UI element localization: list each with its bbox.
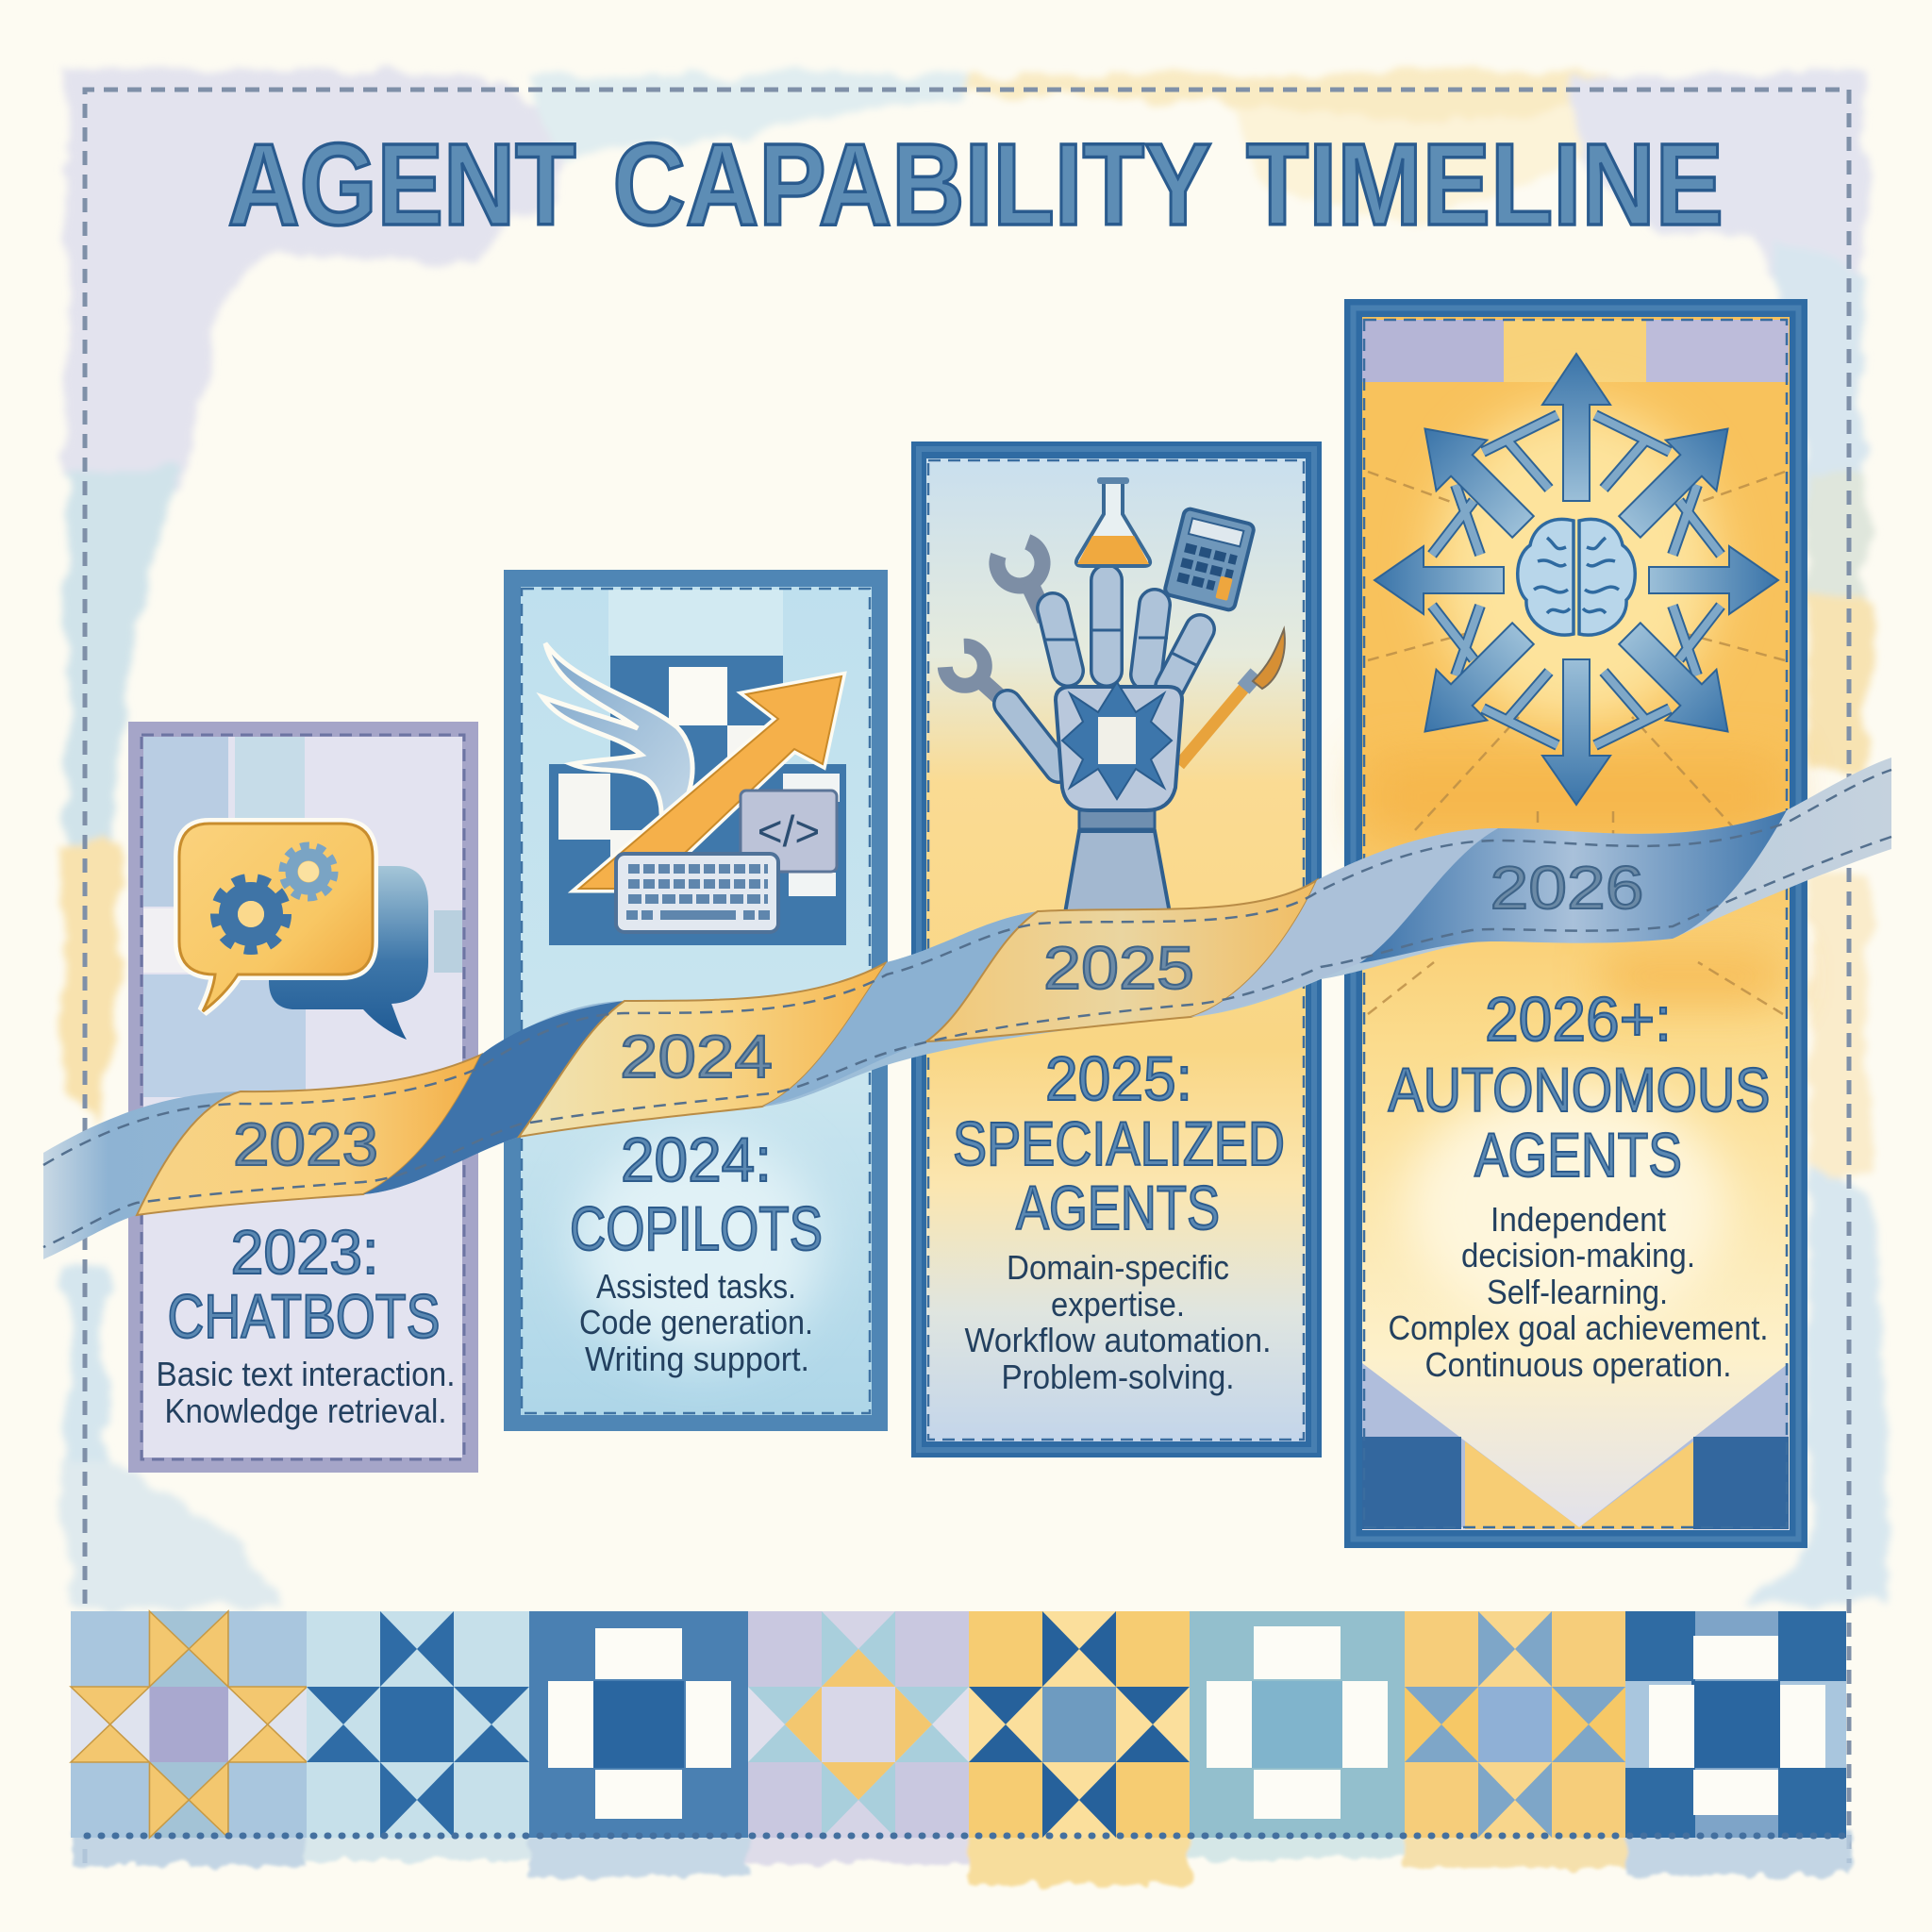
heading: 2025 specialized agents: SPECIALIZED [953,1108,1285,1178]
text: 2026 description [1389,1200,1768,1384]
text: 2023 description: Knowledge retrieval. [164,1391,447,1430]
icon: calculator [1164,508,1255,611]
panel: 2025 specialized agents [911,441,1322,1457]
icon: arrow up [1542,354,1610,501]
quilt block 6: aqua nine-patch [1190,1611,1405,1838]
year label: 2023: 2023 [233,1110,378,1178]
year label: 2025: 2025 [1043,934,1194,1002]
icon: flask [1076,477,1150,566]
year label: 2024: 2024 [620,1023,773,1091]
ribbon segment: 2025 [926,880,1317,1041]
icon: chevron quilt base [1362,1363,1789,1529]
icon: quilt star on palm [1062,682,1172,799]
text: 2024 description: Assisted tasks. [596,1267,796,1306]
timeline ribbon [43,758,1891,1259]
year label: 2026: 2026 [1491,854,1643,922]
panel: 2023 chatbots [128,722,478,1473]
text: 2026 description: Self-learning. [1487,1273,1668,1311]
icon: keyboard [616,854,778,932]
text: 2026 description: Independent [1491,1200,1666,1239]
title: AGENT [228,121,575,250]
quilt block 7: gold and blue star [1405,1611,1625,1838]
icon: upper wrench [992,539,1067,629]
heading: 2026 autonomous agents: AUTONOMOUS [1389,1055,1770,1124]
text: 2026 description: Continuous operation. [1424,1345,1732,1384]
icon: lower wrench [941,641,1022,720]
text: 2024 description [579,1267,813,1378]
watercolor frame wash [57,69,1887,1608]
text: 2024 description: Code generation. [579,1303,813,1341]
text: 2023 description [157,1355,455,1430]
heading: 2025 specialized agents: 2025: [1045,1043,1192,1113]
title: CAPABILITY [613,121,1211,250]
ribbon twist: 2023 to 2024 [363,1001,625,1194]
icon: paintbrush [1179,629,1285,765]
icon: robot hand with tools [941,477,1285,913]
quilt band [71,1611,1849,1838]
ribbon segment: 2023 [137,1055,481,1215]
icon: rising arrow [579,676,841,889]
ribbon twist: 2024 to 2025 [762,911,1038,1107]
icon: connecting struts [1432,415,1721,745]
icon: arrow right [1649,546,1778,614]
panel frame: 2026 [1353,308,1798,1540]
ribbon twist: 2025 to 2026 [1191,828,1498,1017]
icon: code window [741,791,837,872]
text: 2024 description: Writing support. [585,1340,809,1378]
text: 2023 description: Basic text interaction. [157,1355,455,1393]
icon: arrow down [1542,659,1610,805]
quilt block 4: lavender star [748,1611,969,1838]
text: 2026 description: decision-making. [1461,1236,1695,1274]
heading: 2024 copilots: COPILOTS [570,1193,823,1263]
icon: arrow lower right [1605,608,1753,757]
heading: 2026 autonomous agents: 2026+: [1485,984,1672,1054]
heading: 2023 chatbots: CHATBOTS [168,1281,440,1351]
icon: small gear [284,847,333,896]
ribbon segment: 2026 [1359,810,1787,963]
ribbon segment: 2024 [519,962,887,1137]
icon: large gear [217,880,285,948]
icon: arrow left [1374,546,1504,614]
icon: brain [1518,519,1635,635]
quilt block 1: gold star [71,1611,307,1838]
heading: 2023 chatbots [168,1217,440,1351]
title [228,121,1724,250]
text: 2025 description: Domain-specific [1007,1248,1229,1287]
icon: wing, arrow and keyboard [542,643,846,945]
icon: arrow lower left [1400,608,1548,757]
heading: 2025 specialized agents: AGENTS [1016,1173,1220,1242]
text: 2025 description: Problem-solving. [1002,1357,1234,1396]
title: TIMELINE [1246,121,1724,250]
icon: code window: </> [758,807,820,856]
heading: 2026 autonomous agents [1389,984,1770,1190]
heading: 2024 copilots [570,1124,823,1263]
panel: 2024 copilots [504,570,888,1431]
quilt dotted stitching [87,1832,1849,1840]
bottom fringe wash [71,1830,1852,1885]
icon: forearm [1065,831,1170,913]
text: 2025 description [964,1248,1272,1396]
heading: 2026 autonomous agents: AGENTS [1474,1120,1682,1190]
quilt block 8: navy nine-patch [1625,1611,1846,1838]
icon: arrow upper right [1605,404,1753,552]
panel: 2026 autonomous agents [1349,304,1802,1543]
heading: 2024 copilots: 2024: [621,1124,772,1194]
icon: arrow upper left [1400,404,1548,552]
heading: 2025 specialized agents [953,1043,1285,1242]
icon: speech bubbles with gears [179,824,428,1040]
quilt block 3: white nine-patch [529,1611,748,1838]
quilt block 5: gold and navy star [969,1611,1190,1838]
heading: 2023 chatbots: 2023: [230,1217,379,1287]
text: 2025 description: expertise. [1051,1285,1185,1324]
quilt block 2: dark star [307,1611,529,1838]
icon: brain with radiating arrows [1374,354,1778,805]
text: 2026 description: Complex goal achievement. [1389,1308,1768,1347]
icon: wing [542,643,692,836]
text: 2025 description: Workflow automation. [964,1321,1272,1359]
